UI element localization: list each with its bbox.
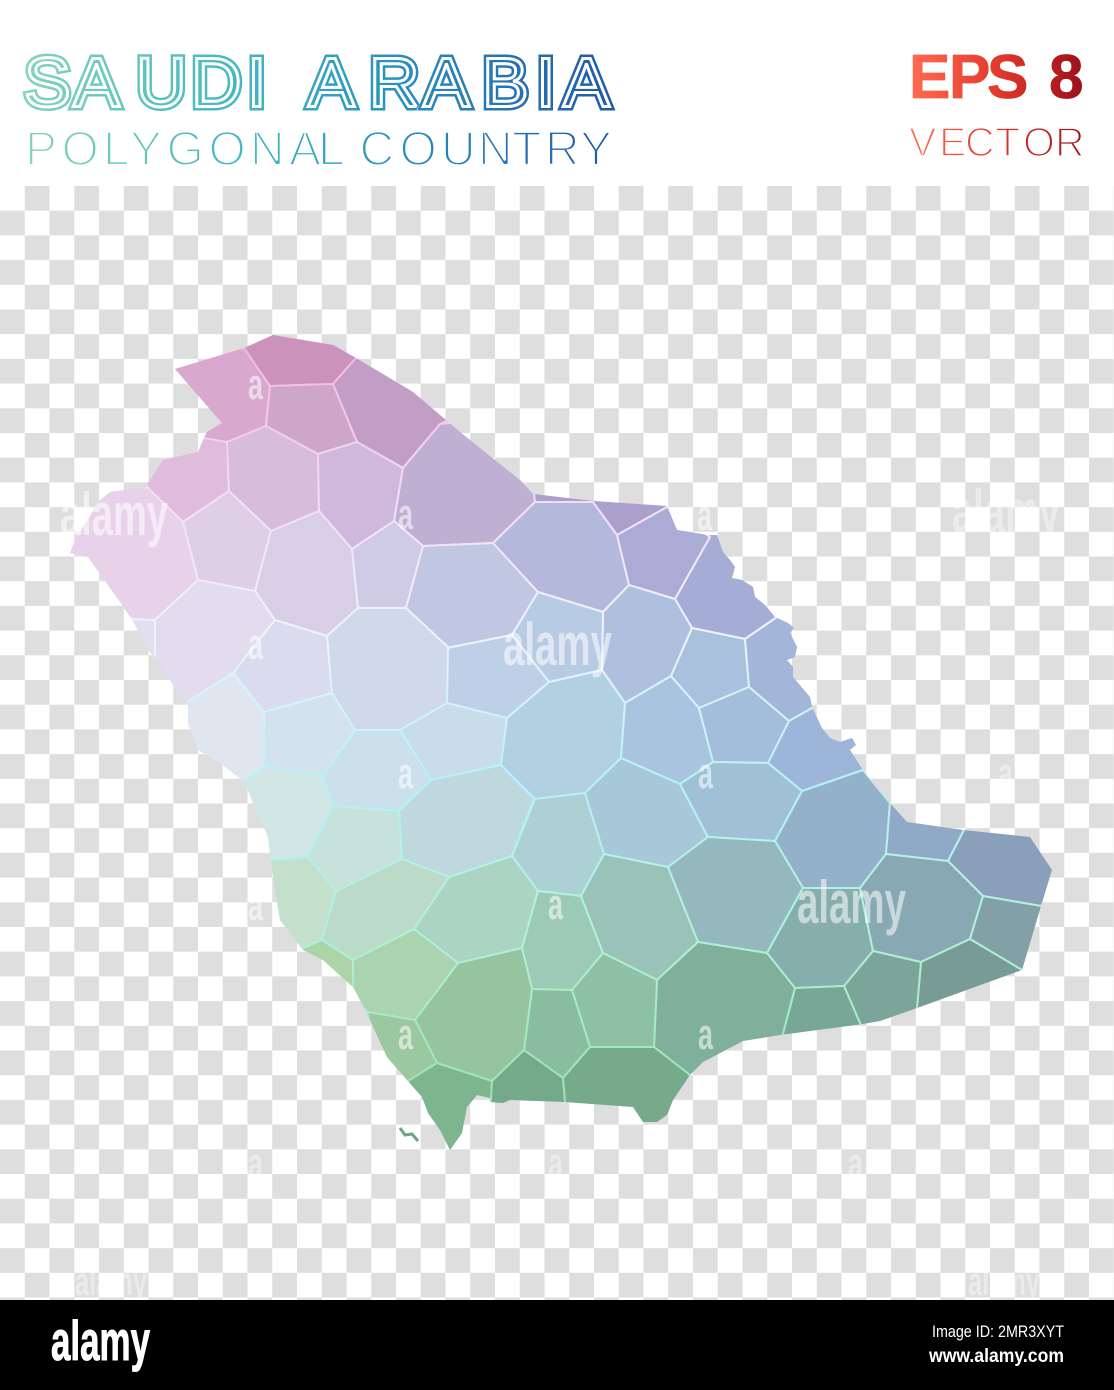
watermarks: alamy (797, 869, 906, 936)
title: Saudi Arabia: ARABIA (308, 44, 610, 122)
title: Saudi Arabia (24, 44, 610, 122)
watermarks: alamy (503, 611, 612, 678)
watermarks: a (398, 490, 413, 539)
title: Saudi Arabia: SAUDI (24, 44, 266, 122)
watermarks: a (698, 749, 713, 798)
watermarks: a (248, 620, 263, 669)
footer logo: alamy: alamy (51, 1309, 150, 1372)
watermarks: a (697, 491, 712, 540)
watermarks: a (548, 880, 563, 929)
island (400, 1128, 418, 1141)
watermarks: a (848, 1139, 863, 1188)
watermarks: a (398, 749, 413, 798)
watermarks: alamy (60, 481, 168, 548)
watermarks: a (548, 1139, 563, 1188)
watermarks: a (698, 1010, 713, 1059)
badge: EPS 8: EPS 8 (909, 43, 1083, 112)
cells: south (255, 837, 1060, 1160)
website: www.alamy.com (928, 1346, 1064, 1367)
cells: north (60, 320, 800, 648)
map: Saudi Arabia polygonal mosaic (60, 320, 1065, 1160)
title: Saudi Arabia: SAUDI (24, 44, 266, 122)
watermarks (60, 360, 1060, 1304)
watermarks: a (248, 1139, 263, 1188)
title: Saudi Arabia: ARABIA (308, 44, 610, 122)
footer bar (0, 1300, 1114, 1390)
watermarks: a (248, 881, 263, 930)
watermarks: alamy (968, 1260, 1040, 1304)
watermarks: a (998, 749, 1013, 798)
cells: centre (125, 580, 1065, 906)
image id: Image ID: 2MR3XYT (932, 1322, 1064, 1341)
watermarks: a (248, 360, 263, 409)
map base (60, 325, 1060, 1155)
watermarks: a (398, 1010, 413, 1059)
watermarks: alamy (75, 1260, 147, 1304)
subtitle: polygonal country: POLYGONAL COUNTRY (25, 123, 612, 176)
badge: vector: VECTOR (909, 119, 1085, 165)
watermarks: a (998, 1010, 1013, 1059)
